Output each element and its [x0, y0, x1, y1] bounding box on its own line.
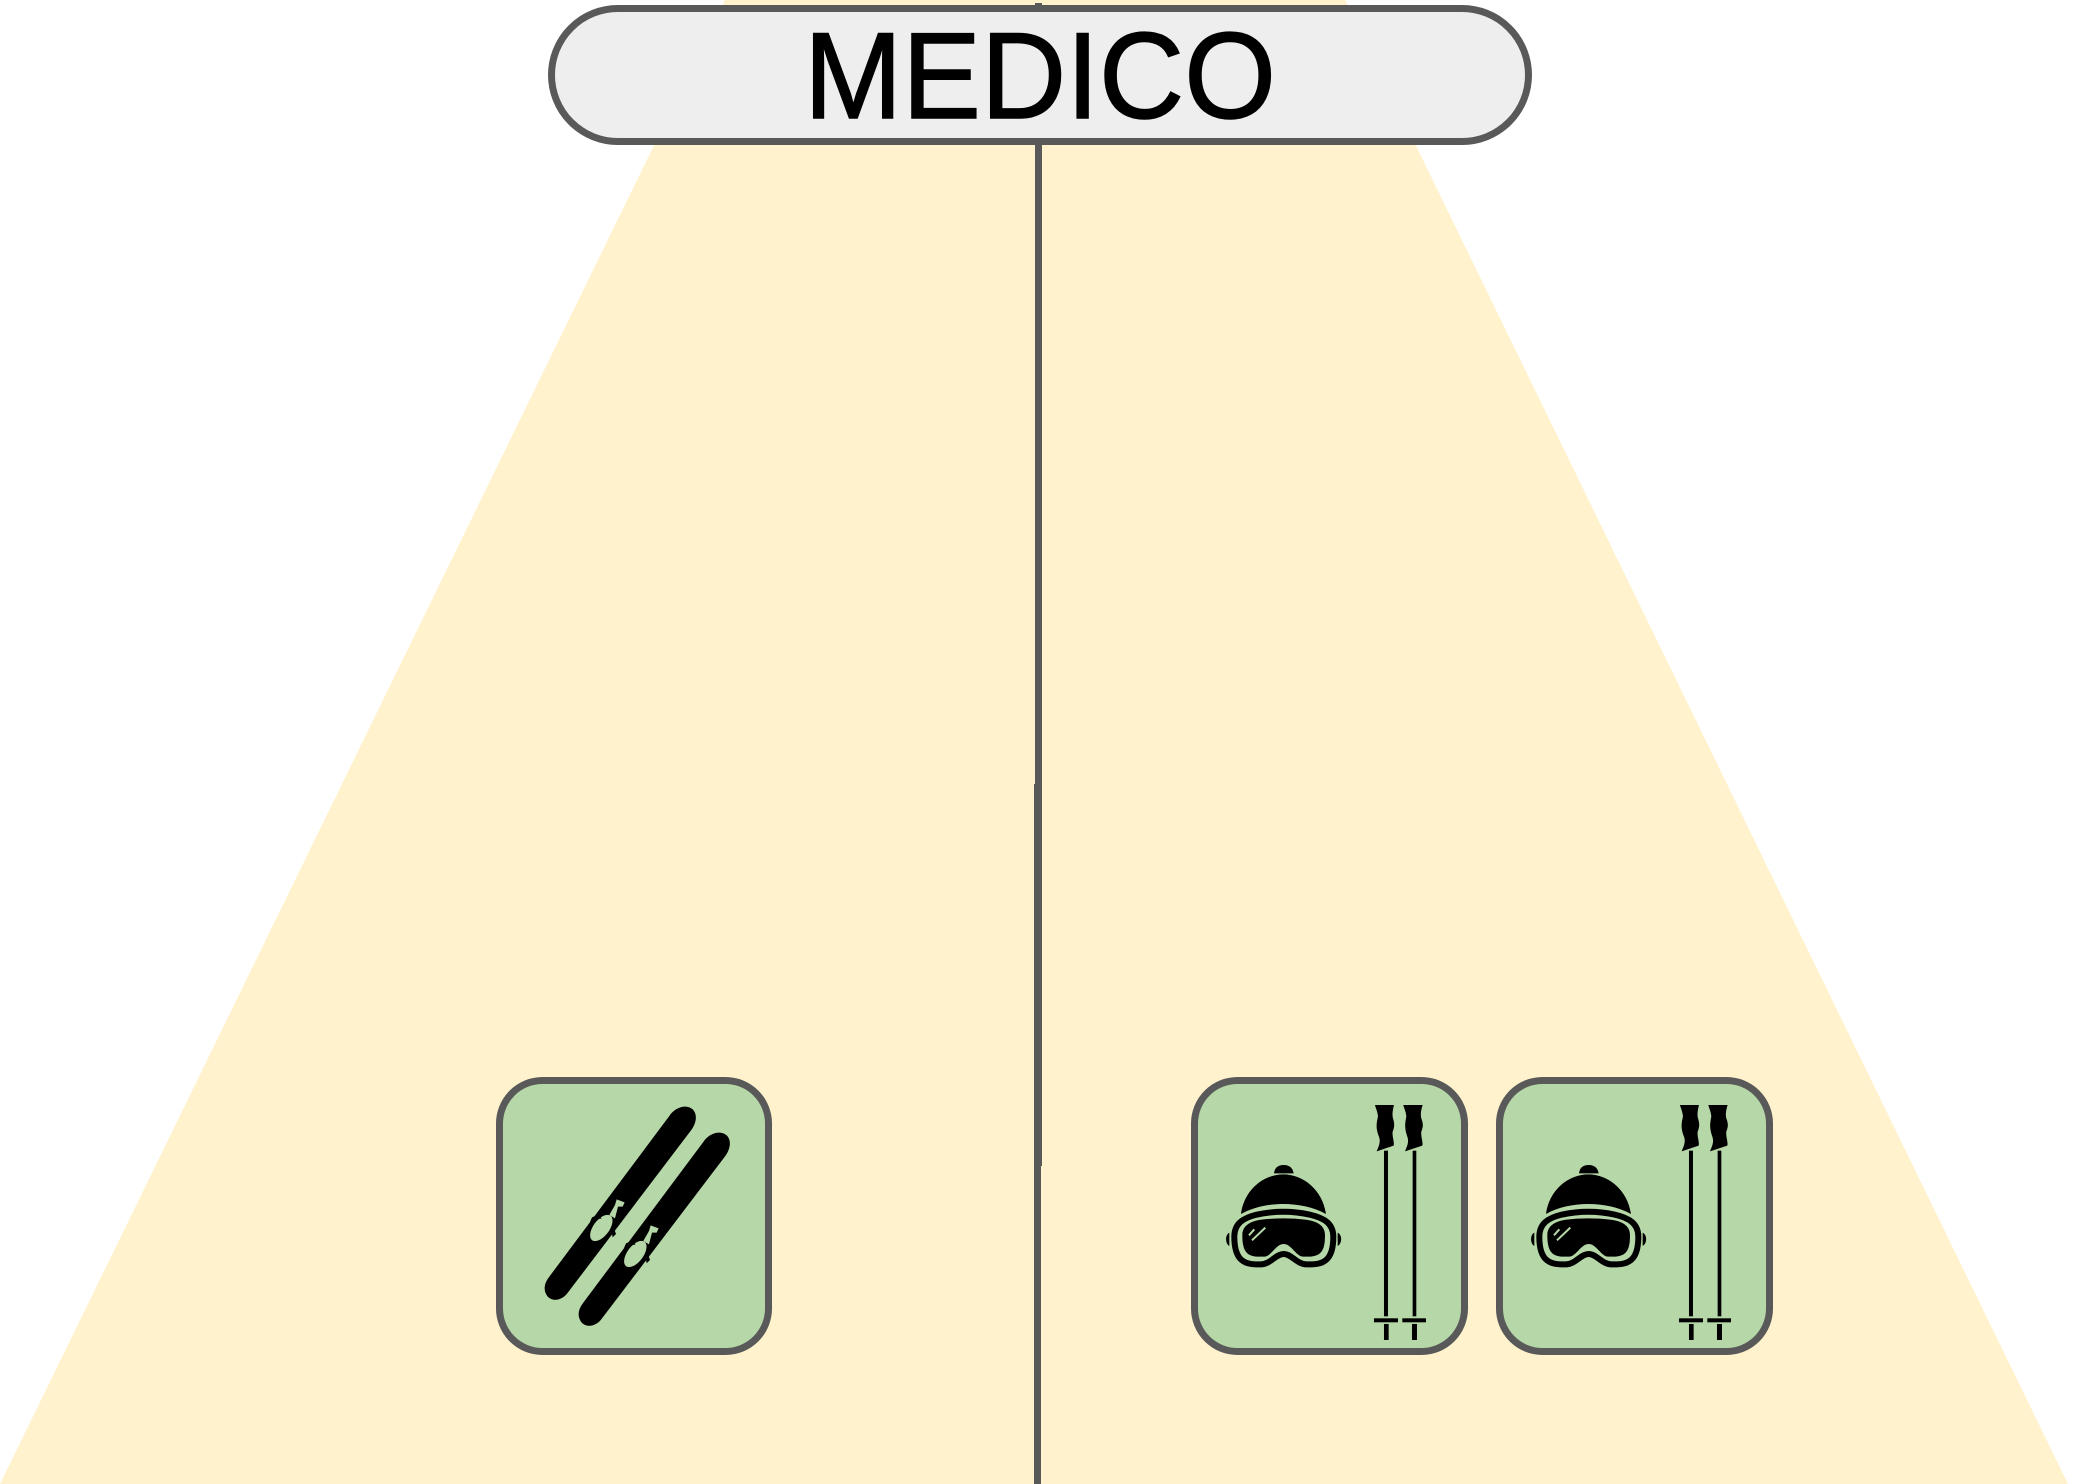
icon: pair of skis [545, 1107, 730, 1326]
central vertical divider line [1034, 3, 1042, 1484]
icon: ski poles [1679, 1105, 1731, 1340]
card: helmet, goggles and poles (second) [1500, 1080, 1770, 1352]
title pill with heading MEDICO [552, 8, 1528, 144]
icon: hat with goggles [1531, 1165, 1646, 1264]
card: helmet, goggles and poles (first) [1194, 1080, 1464, 1352]
icon: ski poles [1374, 1105, 1426, 1340]
card: skis [500, 1080, 768, 1352]
title pill with heading MEDICO: MEDICO [804, 8, 1276, 144]
icon: hat with goggles [1226, 1165, 1341, 1264]
